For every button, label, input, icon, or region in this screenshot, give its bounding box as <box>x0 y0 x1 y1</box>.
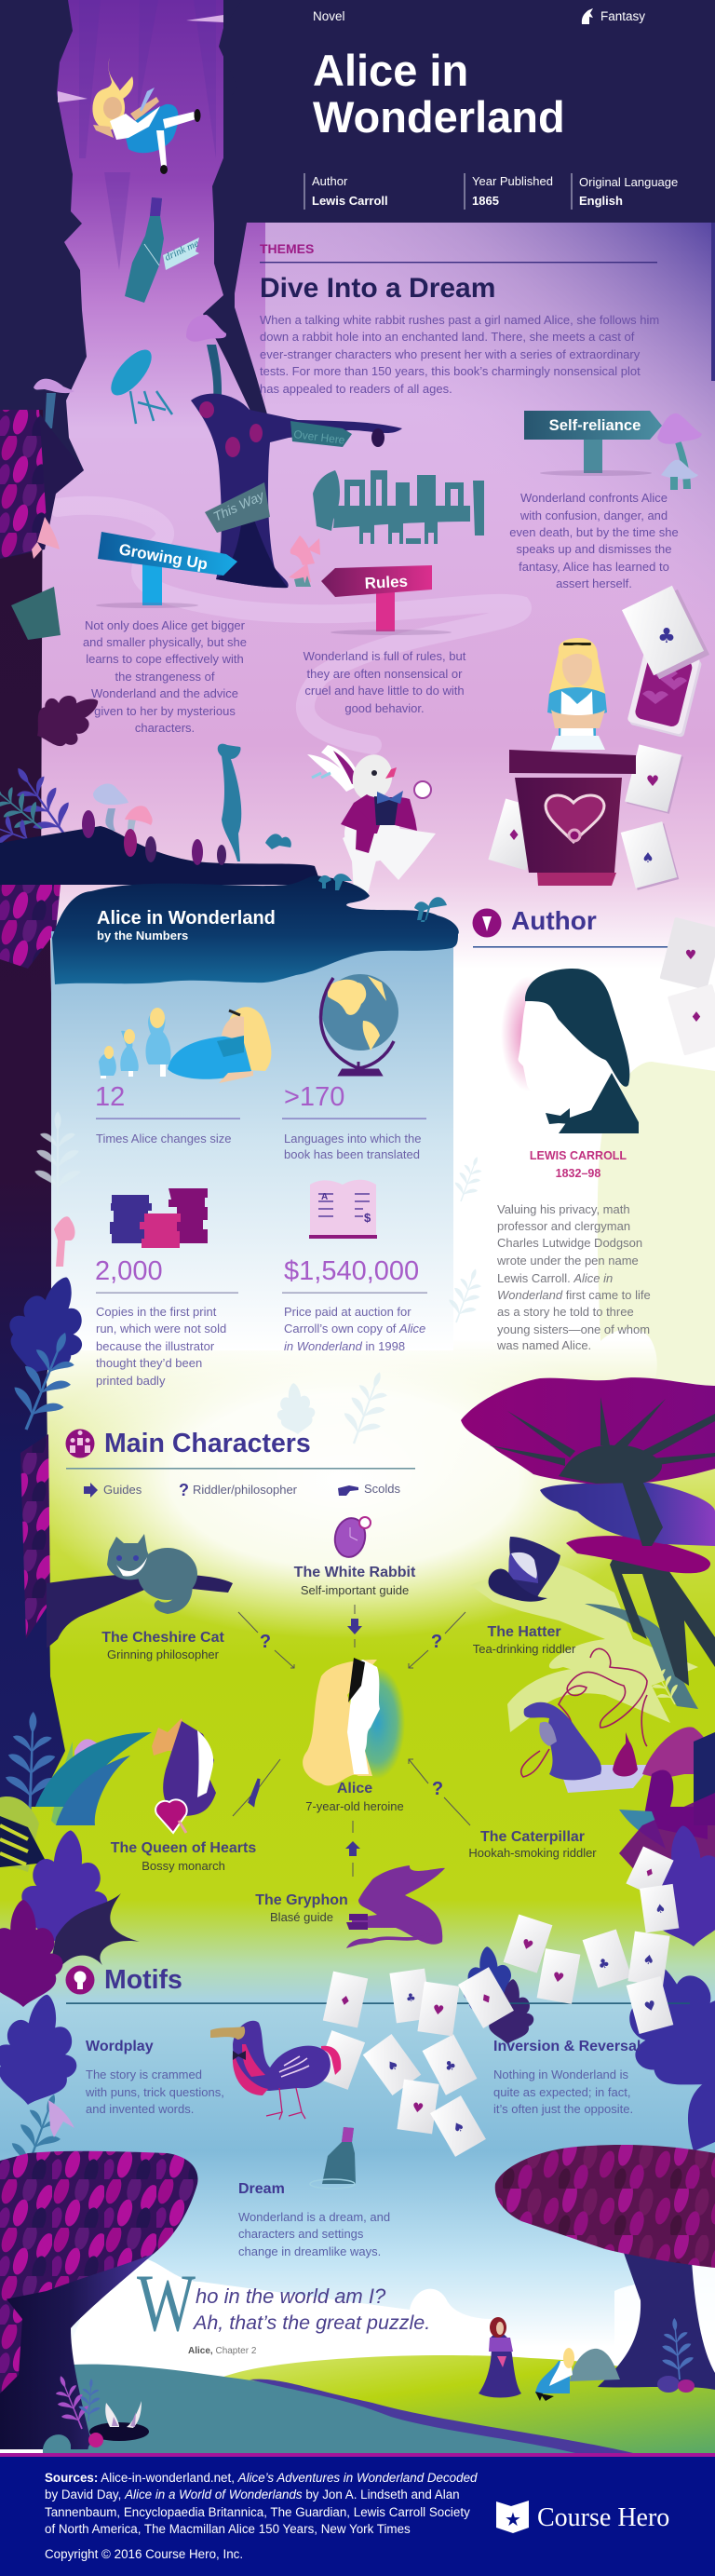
header type labels <box>313 9 645 23</box>
stems <box>610 1481 715 1686</box>
author bio: Wonderland first came to life <box>497 1288 651 1302</box>
stat 2,000: printed badly <box>96 1374 166 1388</box>
sign: growing up <box>96 532 237 608</box>
character: white rabbit label: Self-important guide <box>301 1583 409 1597</box>
author rule <box>473 946 670 948</box>
illustration: flying cards: ♦ <box>642 1864 656 1881</box>
motif: inversion and reversal: Nothing in Wonderland is <box>493 2068 629 2081</box>
header blob <box>52 875 459 984</box>
self-reliance text: even death, but by the time she <box>509 525 679 539</box>
motif: dream: Wonderland is a dream, and <box>238 2210 390 2224</box>
illustration: caterpillar and hookah <box>521 1648 652 1793</box>
small mushrooms on blob <box>318 874 447 922</box>
illustration: giant mushrooms <box>461 1377 715 1732</box>
leaf tufts on ground <box>82 810 226 865</box>
flying cards right of author <box>660 917 715 1056</box>
motif: dream: change in dreamlike ways. <box>238 2244 381 2258</box>
rules text: cruel and have little to do with <box>304 684 465 698</box>
mushrooms near tree <box>289 536 320 587</box>
motif: inversion and reversal: it’s often just the opposite. <box>493 2102 633 2116</box>
illustration: bottle in sky <box>310 2127 356 2189</box>
illustration: flying cards around pot: ♠ <box>641 849 654 866</box>
sources: Sources: Alice-in-wonderland.net, Alice’s Adventures in Wonderland Decoded <box>45 2471 478 2485</box>
stat 2,000: 2,000 <box>95 1256 163 1286</box>
author bio: Valuing his privacy, math <box>497 1202 630 1216</box>
author bio: was named Alice. <box>496 1338 591 1352</box>
stat 12: Times Alice changes size <box>96 1132 231 1146</box>
sign: self-reliance: Self-reliance <box>549 416 641 434</box>
character: queen label <box>111 1840 256 1873</box>
illustration: signpost tree: This Way <box>211 487 267 524</box>
stat 170: >170 <box>284 1082 344 1112</box>
cap top magenta <box>461 1377 715 1484</box>
stat 2,000: because the illustrator <box>96 1339 215 1353</box>
quote text: ho in the world am I? <box>196 2285 386 2308</box>
clouds <box>56 2254 715 2384</box>
legend <box>84 1481 401 1499</box>
stat price: $1,540,000 <box>284 1256 419 1286</box>
title <box>313 46 565 142</box>
pale Alice silhouette <box>598 1062 715 1397</box>
rules text: Wonderland is full of rules, but <box>304 649 466 663</box>
illustration: flying cards: ♠ <box>654 1902 667 1918</box>
pale leaves decor <box>34 1111 490 1450</box>
illustration: flying cards: ♥ <box>519 1936 535 1954</box>
sign: rules <box>321 565 452 635</box>
stat 2,000: run, which were not sold <box>96 1322 226 1335</box>
arrows: riddler connectors <box>233 1612 470 1825</box>
logo: course hero: ★ <box>505 2508 521 2530</box>
growing up text: Wonderland and the advice <box>91 686 238 700</box>
gills <box>489 1397 715 1484</box>
author name: LEWIS CARROLL <box>530 1149 627 1162</box>
panel: themes <box>260 241 659 396</box>
growing up text: given to her by mysterious <box>94 704 236 718</box>
ground: green hill <box>74 2355 715 2453</box>
illustration: left tree trunk <box>0 410 65 1807</box>
character: queen label: Bossy monarch <box>142 1859 225 1873</box>
author bio: professor and clergyman <box>497 1219 630 1233</box>
themes intro text <box>260 313 659 396</box>
self-reliance text <box>509 491 679 590</box>
title: Wonderland <box>313 92 565 142</box>
author name: 1832–98 <box>556 1167 600 1180</box>
sign: over here <box>290 421 352 447</box>
stat price: Carroll’s own copy of Alice <box>284 1322 425 1335</box>
stat 2,000: Copies in the first print <box>96 1305 217 1319</box>
illustration: flying cards: ♥ <box>551 1970 565 1986</box>
character: white rabbit label <box>294 1565 416 1597</box>
mad tea party table <box>313 470 484 544</box>
illustration: mushrooms upper <box>34 315 226 428</box>
self-reliance text: fantasy, Alice has learned to <box>519 560 669 574</box>
illustration: heart pot <box>509 750 636 886</box>
self-reliance text: Wonderland confronts Alice <box>520 491 668 505</box>
illustration: globe <box>321 974 398 1075</box>
rabbit hole purple shaft <box>51 0 265 438</box>
stats heading: Alice in Wonderland <box>97 908 276 929</box>
illustration: queen of hearts <box>152 1718 216 1833</box>
character: hatter label <box>473 1624 576 1656</box>
book metadata: Original Language <box>579 175 678 189</box>
shaft stripes <box>79 0 216 270</box>
book metadata <box>304 173 678 210</box>
illustration: bottom-left tree <box>0 2151 198 2449</box>
illustration: gryphon <box>346 1865 445 1948</box>
illustration: flying cards: ♠ <box>641 1952 655 1969</box>
illustration: flying cards <box>315 1846 679 2157</box>
sources: Tannenbaum, Encyclopaedia Britannica, The Guardian, Lewis Carroll Society <box>45 2505 470 2519</box>
illustration: flying cards around pot <box>488 586 709 890</box>
characters heading: Main Characters <box>104 1429 311 1458</box>
stat 170: Languages into which the <box>284 1132 421 1146</box>
cap low magenta <box>566 1536 710 1573</box>
growing up text: learns to cope effectively with <box>86 652 244 666</box>
sign: that way <box>11 587 61 640</box>
illustration: hatter hat <box>489 1537 560 1602</box>
header type labels: Fantasy <box>600 9 645 23</box>
author bio: young sisters—one of whom <box>497 1322 650 1336</box>
author icon <box>473 909 501 937</box>
character: caterpillar label: The Caterpillar <box>480 1829 585 1845</box>
stats heading <box>97 908 276 942</box>
section: main characters <box>65 1429 415 1499</box>
quote text <box>192 2285 430 2334</box>
book metadata: Lewis Carroll <box>312 194 388 208</box>
sign: growing up: Growing Up <box>117 540 209 574</box>
character: cheshire cat label <box>101 1630 224 1661</box>
motif: wordplay: and invented words. <box>86 2102 194 2116</box>
cheshire cat <box>107 1534 197 1614</box>
motifs icon <box>65 1965 95 1995</box>
sources: by David Day, Alice in a World of Wonderlands by Jon A. Lindseth and Alan <box>45 2488 460 2501</box>
character: caterpillar label <box>468 1829 597 1860</box>
self-reliance text: with confusion, danger, and <box>519 508 668 522</box>
footer <box>0 2453 715 2576</box>
motif: inversion and reversal: Inversion & Reversal <box>493 2039 641 2054</box>
character: gryphon label <box>255 1892 348 1924</box>
rules text <box>304 649 466 715</box>
arrow: gryphon to alice <box>345 1821 360 1877</box>
stats heading: by the Numbers <box>97 929 188 942</box>
character: gryphon label: The Gryphon <box>255 1892 348 1908</box>
riddler question marks <box>260 1632 443 1799</box>
motif: dream: characters and settings <box>238 2227 364 2241</box>
sign: rules: Rules <box>364 573 408 592</box>
illustration: tumbling table <box>104 344 172 424</box>
themes label: THEMES <box>260 241 314 256</box>
riddler question marks: ? <box>260 1632 271 1652</box>
characters rule <box>66 1468 415 1470</box>
illustration: flying cards: ♣ <box>596 1956 612 1973</box>
illustration: book stacks <box>110 1188 208 1248</box>
motif: wordplay <box>85 2039 224 2116</box>
growing up text: characters. <box>135 721 195 735</box>
character: white rabbit label: The White Rabbit <box>294 1565 416 1580</box>
illustration: left canopy leaves <box>0 410 84 1639</box>
motif: dream: Dream <box>238 2181 285 2197</box>
arrow: rabbit to alice <box>347 1605 362 1647</box>
stat 2,000: thought they’d been <box>96 1356 202 1370</box>
book metadata: Author <box>312 174 348 188</box>
dark header and cave walls <box>0 0 715 540</box>
character: gryphon label: Blasé guide <box>270 1910 333 1924</box>
sign: self-reliance <box>524 411 662 476</box>
illustration: flying cards around pot: ♦ <box>507 826 520 844</box>
growing up text <box>83 618 247 735</box>
mushrooms beside self-reliance <box>657 414 702 490</box>
illustration: flying cards: ♠ <box>451 2119 467 2137</box>
illustration: signpost tree <box>191 394 402 588</box>
motif: inversion and reversal <box>493 2039 641 2116</box>
riddler question marks: ? <box>431 1632 442 1652</box>
stat price: in Wonderland in 1998 <box>284 1339 405 1353</box>
character: hatter label: Tea-drinking riddler <box>473 1642 576 1656</box>
themes intro text: down a rabbit hole into an enchanted land. There, she meets a cast of <box>260 330 635 344</box>
legend: Riddler/philosopher <box>193 1483 298 1497</box>
themes heading: Dive Into a Dream <box>260 273 495 304</box>
illustration: flying cards around pot: ♣ <box>657 625 676 648</box>
character: queen label: The Queen of Hearts <box>111 1840 256 1856</box>
mushroom on trunk <box>32 517 60 559</box>
author heading: Author <box>511 906 597 935</box>
illustration: drink me bottle: drink me <box>163 237 201 264</box>
illustration: flying cards: ♠ <box>384 2056 402 2076</box>
motif: wordplay: with puns, trick questions, <box>85 2085 224 2099</box>
flying cards right of author: ♦ <box>690 1009 703 1025</box>
illustration: rabbit ears and hole <box>43 2370 149 2453</box>
sign: this way <box>205 482 270 533</box>
illustration: left side plants <box>0 1711 152 2187</box>
character: alice central <box>303 1658 405 1785</box>
illustration: ground blob <box>0 826 321 885</box>
header type labels: Novel <box>313 9 345 23</box>
author bio <box>496 1202 651 1352</box>
illustration: flying cards: ♦ <box>479 1990 495 2009</box>
illustration: flying cards: ♦ <box>338 1993 352 2010</box>
illustration: dodo <box>210 2021 341 2120</box>
rules text: good behavior. <box>344 701 425 715</box>
copyright: Copyright © 2016 Course Hero, Inc. <box>45 2547 243 2561</box>
book metadata: Year Published <box>472 174 553 188</box>
pale smoke <box>470 1565 698 1686</box>
illustration: open book: A <box>321 1192 328 1202</box>
legend: Guides <box>103 1483 142 1497</box>
growing up text: the strangeness of <box>115 670 215 684</box>
author bio: Charles Lutwidge Dodgson <box>497 1236 642 1250</box>
quote attribution: Alice, Chapter 2 <box>188 2346 257 2356</box>
motif: dream <box>238 2181 390 2258</box>
character: alice label: 7-year-old heroine <box>305 1799 404 1813</box>
themes intro text: has appealed to readers of all ages. <box>260 382 452 396</box>
stems over <box>622 1481 663 1546</box>
illustration: left branch and cat <box>47 1534 233 1648</box>
legend: Scolds <box>364 1482 401 1496</box>
logo: course hero <box>496 2501 669 2533</box>
illustration: bottom-left plants of theme section <box>0 678 111 859</box>
panel: author <box>473 906 715 1397</box>
teal leaf <box>585 1604 698 1709</box>
characters icon <box>65 1429 95 1458</box>
themes intro text: When a talking white rabbit rushes past a girl named Alice, she follows him <box>260 313 659 327</box>
illustration: flying cards: ♣ <box>442 2057 459 2076</box>
icon: unicorn <box>582 8 593 24</box>
sources: of North America, The Macmillan Alice 150 Years, New York Times <box>45 2522 411 2536</box>
illustration: drink me bottle <box>125 197 201 303</box>
themes rule <box>260 262 657 263</box>
stat 170: book has been translated <box>284 1147 420 1161</box>
illustration: open book: $ <box>364 1211 371 1225</box>
illustration: flying cards: ♥ <box>642 1999 658 2015</box>
book metadata: English <box>579 194 623 208</box>
illustration: Alice behind pot <box>547 638 607 750</box>
ground: purple road <box>250 2379 633 2453</box>
motifs rule <box>66 2002 690 2004</box>
character: alice label <box>305 1781 404 1813</box>
icon: pocket watch <box>332 1516 371 1559</box>
illustration: small mushrooms and ostrich bird <box>93 744 291 861</box>
author face silhouette <box>519 978 610 1094</box>
character: cheshire cat label: The Cheshire Cat <box>101 1630 224 1646</box>
character: hatter label: The Hatter <box>487 1624 561 1640</box>
motif: wordplay: The story is crammed <box>86 2068 202 2081</box>
author name <box>530 1149 627 1180</box>
motif: inversion and reversal: quite as expected; in fact, <box>493 2085 630 2099</box>
rules text: they are often nonsensical or <box>307 667 463 681</box>
stat 170 <box>282 1082 426 1161</box>
quote <box>137 2258 430 2356</box>
illustration: plants right <box>657 2316 695 2393</box>
sources <box>45 2471 478 2536</box>
illustration: flying cards: ♥ <box>431 2002 445 2019</box>
author bio: as a story he told to three <box>497 1305 634 1319</box>
panel: stats <box>51 874 459 1388</box>
character: alice label: Alice <box>337 1781 372 1796</box>
illustration: open book <box>309 1180 377 1239</box>
author bio: Lewis Carroll. Alice in <box>497 1271 613 1285</box>
legend: ? <box>179 1481 189 1499</box>
illustration: Alices growing <box>99 1007 271 1083</box>
character: cheshire cat label: Grinning philosopher <box>107 1647 220 1661</box>
pink glow <box>501 976 557 1091</box>
stat 12 <box>95 1082 240 1146</box>
icon: scold hand <box>250 1779 259 1805</box>
stat price: Price paid at auction for <box>284 1305 411 1319</box>
growing up text: Not only does Alice get bigger <box>85 618 246 632</box>
stat 2,000 <box>95 1256 238 1388</box>
self-reliance text: assert herself. <box>556 576 632 590</box>
growing up text: and smaller physically, but she <box>83 635 247 649</box>
drop cap: W <box>137 2258 196 2349</box>
ground: teal hill <box>56 2365 633 2453</box>
stat 12: 12 <box>95 1082 125 1112</box>
illustration: bottom-right tree <box>495 2145 715 2390</box>
illustration: falling Alice <box>92 58 201 174</box>
illustration: sitting Alice <box>535 2348 574 2401</box>
left plants beside stats <box>0 1216 102 1440</box>
logo: course hero: Course Hero <box>537 2503 669 2532</box>
illustration: flying cards: ♣ <box>405 1990 417 2005</box>
illustration: white rabbit <box>307 745 436 894</box>
motifs heading: Motifs <box>104 1965 182 1995</box>
illustration: flying cards around pot: ♥ <box>646 772 659 790</box>
motif: wordplay: Wordplay <box>86 2039 154 2054</box>
illustration: red-haired sister <box>479 2317 521 2397</box>
flying cards right of author: ♥ <box>685 948 696 963</box>
title: Alice in <box>313 46 468 95</box>
themes intro text: ever-stranger characters who present her with a series of extraordinary <box>260 347 641 361</box>
illustration: signpost tree: Over Here <box>293 427 346 447</box>
highlight slivers on shaft <box>58 15 223 102</box>
book metadata: 1865 <box>472 194 499 208</box>
themes intro text: tests. For more than 150 years, this book’s charmingly nonsensical plot <box>260 364 641 378</box>
self-reliance text: speaks up and dismisses the <box>517 542 671 556</box>
character: caterpillar label: Hookah-smoking riddler <box>468 1846 597 1860</box>
winding road on lavender ground <box>58 506 522 745</box>
illustration: right plants <box>460 1657 715 2151</box>
illustration: rock <box>570 2349 620 2381</box>
section: motifs <box>65 1965 690 2004</box>
stat price <box>282 1256 427 1353</box>
illustration: flying cards: ♥ <box>411 2100 425 2117</box>
cap purple <box>540 1483 715 1546</box>
author bio: wrote under the pen name <box>496 1254 639 1268</box>
author portrait <box>525 969 639 1133</box>
quote text: Ah, that’s the great puzzle. <box>192 2312 430 2334</box>
riddler question marks: ? <box>432 1779 443 1799</box>
